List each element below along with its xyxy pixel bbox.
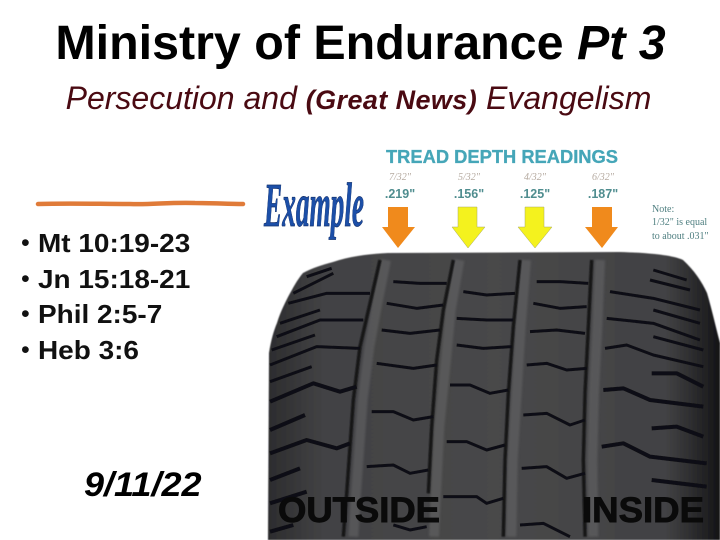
note: Note: — [652, 204, 674, 215]
note: 1/32" is equal — [652, 217, 707, 228]
scripture list: Heb 3:6 — [38, 334, 139, 364]
reading labels: .219" — [385, 187, 415, 201]
subtitle: Persecution and (Great News) Evangelism — [66, 80, 651, 116]
title: Ministry of Endurance Pt 3 — [55, 16, 666, 70]
label: INSIDE: INSIDE — [582, 491, 704, 530]
scripture list: Mt 10:19-23 — [38, 228, 190, 258]
scripture list: • — [21, 336, 30, 364]
reading labels: .125" — [520, 187, 550, 201]
tread ribs — [353, 260, 600, 537]
scripture list: • — [21, 300, 30, 328]
scripture list: • — [21, 229, 30, 257]
reading sublabels — [389, 172, 615, 183]
scripture list: Phil 2:5-7 — [38, 299, 162, 329]
tire image panel: Example — [264, 172, 364, 240]
arrow: yellow 2 — [518, 207, 552, 248]
main grooves — [343, 260, 592, 537]
reading sublabels: 5/32" — [458, 172, 481, 183]
reading labels: .187" — [588, 187, 618, 201]
reading labels — [385, 187, 618, 201]
note: to about .031" — [652, 231, 709, 242]
reading sublabels: 6/32" — [592, 172, 615, 183]
date: 9/11/22 — [84, 466, 202, 504]
arrow: yellow 1 — [452, 207, 485, 248]
reading sublabels: 7/32" — [389, 172, 412, 183]
scripture list — [21, 228, 190, 364]
reading labels: .156" — [454, 187, 484, 201]
arrow: orange inside — [585, 207, 618, 248]
tread sipes — [270, 268, 707, 537]
arrow: orange outside — [382, 207, 415, 248]
scripture list: Jn 15:18-21 — [38, 264, 190, 294]
note — [652, 204, 709, 242]
scripture list: • — [21, 264, 30, 292]
reading sublabels: 4/32" — [524, 172, 547, 183]
hand-drawn orange line — [38, 203, 243, 204]
label: OUTSIDE: OUTSIDE — [278, 491, 440, 530]
chart heading: tread depth readings: TREAD DEPTH READINGS — [386, 147, 618, 167]
tire — [268, 252, 720, 540]
